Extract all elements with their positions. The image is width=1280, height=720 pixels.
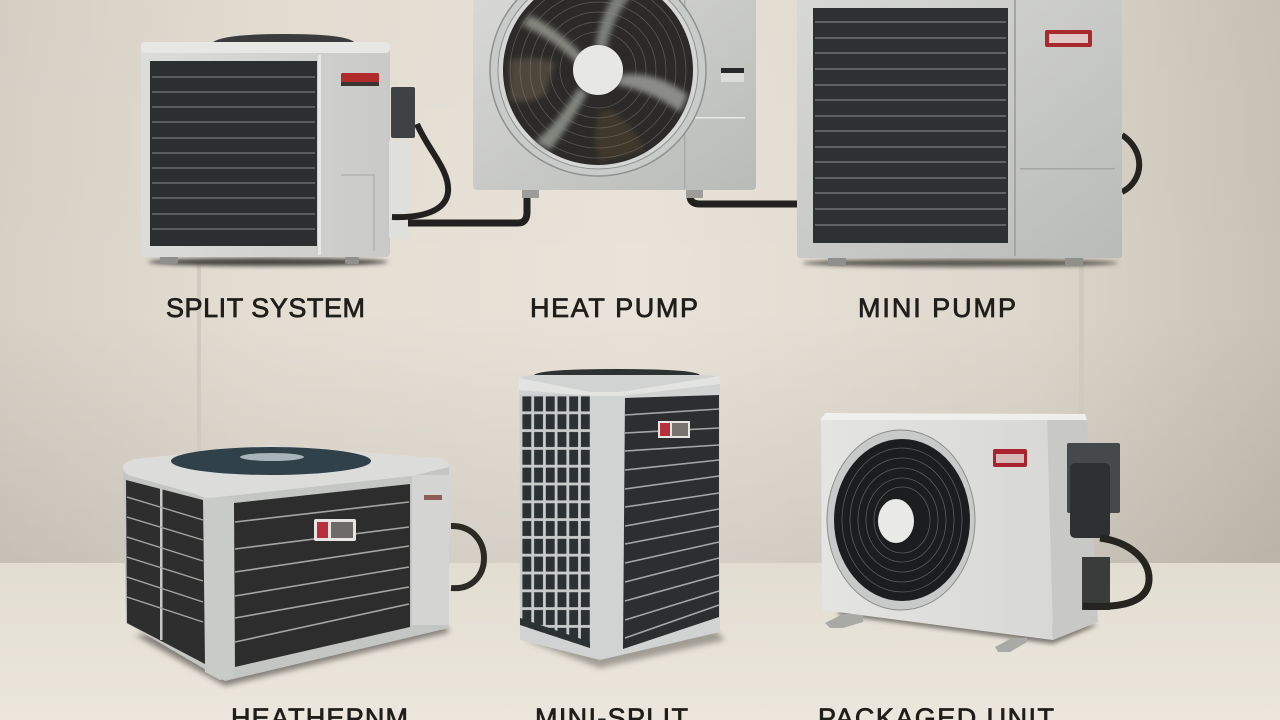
grid side [520,395,590,648]
logo badge [658,421,690,438]
grille: mini pump [813,8,1008,243]
unit: mini pump [797,0,1139,267]
unit: heat pump [473,0,797,204]
grille: split system [150,61,317,246]
vent slot [721,68,744,82]
unit: packaged unit [821,413,1149,652]
logo badge [1045,30,1092,47]
unit: heathepnm [123,445,484,686]
labels row one: MINI PUMP [858,293,1016,323]
fan: packaged unit [827,430,975,610]
labels row one [166,293,1016,323]
logo badge [314,519,356,541]
labels row two [231,703,1054,720]
logo badge [993,449,1027,467]
labels row one: SPLIT SYSTEM [166,293,365,323]
front grille [234,484,410,667]
side grille [126,480,205,664]
logo badge [341,73,379,86]
control box [1067,443,1120,610]
slatted side [623,395,719,649]
fan: heat pump [490,0,706,176]
labels row one: HEAT PUMP [530,293,698,323]
unit: mini-split [519,369,725,668]
unit: split system [141,34,539,266]
top fan [171,447,371,475]
